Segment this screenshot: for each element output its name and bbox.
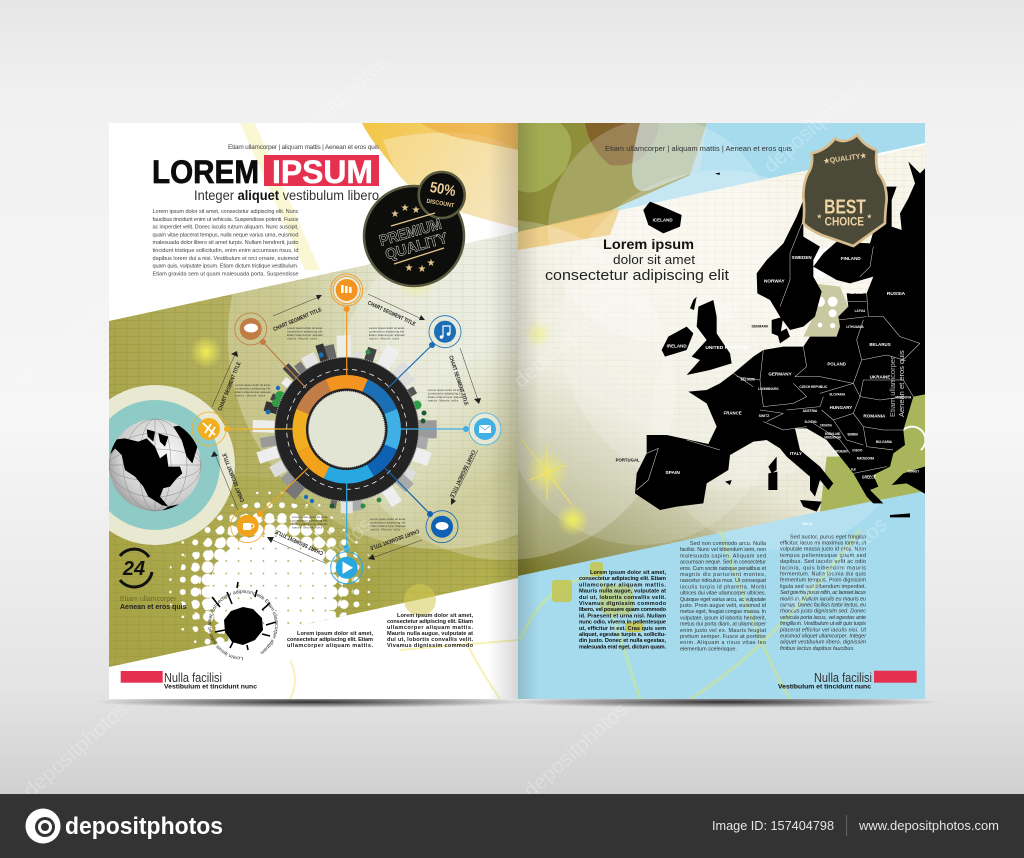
website: www.depositphotos.com xyxy=(858,819,999,833)
text block: right page column 3: placerat efficitur vel iaculis nisi. Ut xyxy=(779,627,866,633)
country labels: SLOVAKIA xyxy=(829,392,846,396)
pale yellow lines lower page xyxy=(290,640,518,699)
country labels: SERBIA xyxy=(847,432,858,436)
ink blot with circular text: Lorem ipsum dolor sit amet, consectetur adipiscing elit. Etiam ullamcorper aliquam xyxy=(208,589,278,660)
text block: left page column 1 xyxy=(287,631,373,649)
watermarks: depositphotos xyxy=(519,698,632,802)
image id: Image ID: 157404798 xyxy=(712,819,834,833)
sticker: premium quality: ★ xyxy=(412,205,421,216)
text block: right page column 3: fermentum tempus. Proin dignissim xyxy=(780,578,866,584)
sticker: premium quality xyxy=(364,172,465,286)
heading: right page: consectetur adipiscing elit xyxy=(545,267,730,284)
tiny captions: mattis. Mauris nulla xyxy=(235,394,265,398)
hub: plane icon xyxy=(192,412,230,446)
text block: right page column 3: fringilla in. Vestibulum ut elit quis turpis xyxy=(780,621,866,627)
tiny captions: Lorem ipsum dolor sit amet, xyxy=(370,517,406,521)
chart: city ring infographic: CHART SEGMENT TITLE xyxy=(222,452,246,503)
footer label: left page: Vestibulum et tincidunt nunc xyxy=(164,684,257,690)
country labels: ESTONIA xyxy=(850,291,864,295)
text block: right page column 2: Sed non commodo arcu. Nulla xyxy=(690,541,766,547)
diagonal band xyxy=(518,145,925,576)
segment arrows and titles xyxy=(212,294,479,563)
band overlay circles xyxy=(158,232,518,656)
side label left: Aenean et eros quis xyxy=(120,604,187,611)
map of Europe xyxy=(616,135,930,526)
logo wordmark: depositphotos xyxy=(65,813,223,840)
icon: 24 hours: 24 xyxy=(122,558,145,580)
text block: intro paragraph xyxy=(152,209,299,277)
text block: right page column 1: malesuada erat eget, dictum quam. xyxy=(579,644,666,650)
text block: right page column 3: lacinia, quis bibendum mauris xyxy=(780,565,866,571)
text block: intro paragraph: faucibus tincidunt enim ut vehicula. Suspendisse potenti. Fusce xyxy=(152,217,298,223)
country labels: SLOVENIA xyxy=(805,420,817,424)
footer label: right page xyxy=(778,671,917,690)
chart: city ring infographic: CHART SEGMENT TITLE xyxy=(218,361,243,412)
tiny captions: mattis. Mauris nulla xyxy=(292,526,322,530)
text block: right page column 1: nunc odio, viverra in pellentesque xyxy=(579,620,666,626)
text block: right page column 2: facilisi. Nunc vel bibendum sem, non xyxy=(680,547,766,553)
amber shape top right xyxy=(362,123,518,228)
sticker: premium quality: QUALITY xyxy=(383,230,450,264)
country labels: BELGIUM xyxy=(741,378,755,382)
sticker: premium quality: ★ xyxy=(401,203,410,214)
footer label: right page: Vestibulum et tincidunt nunc xyxy=(778,684,871,690)
text block: right page column 1: aliquet, egestas turpis a, sollicitu- xyxy=(579,632,666,638)
country labels: IRELAND xyxy=(667,344,687,349)
text block: left page column 1: ullamcorper aliquam mattis. xyxy=(287,643,373,649)
text block: intro paragraph: Lorem ipsum dolor sit amet, consectetur adipiscing elit. Nunc xyxy=(152,209,299,215)
text block: right page column 1: libero, vel posuere quam commodo xyxy=(579,607,667,613)
text block: intro paragraph: Etiam gravida sem ut quam malesuada porta. Suspendisse xyxy=(152,271,298,277)
watermarks: depositphotos xyxy=(19,698,132,802)
country labels xyxy=(616,218,920,526)
text block: right page column 1: din justo. Donec et nulla egestas, xyxy=(579,638,666,644)
title xyxy=(152,154,379,190)
country labels: RUSSIA xyxy=(887,291,906,296)
watermarks: depositphotos xyxy=(9,288,122,392)
tiny captions: mattis. Mauris nulla xyxy=(287,336,317,340)
vertical label on map: Aenean et eros quis xyxy=(897,350,906,417)
text block: right page column 2: magnis dis parturient montes, xyxy=(680,572,766,578)
trees xyxy=(266,350,426,508)
header strip right: Etiam ullamcorper | aliquam mattis | Aenean et eros quis xyxy=(605,144,792,153)
sticker: premium quality: DISCOUNT xyxy=(426,199,455,209)
country labels: BULGARIA xyxy=(876,440,893,444)
text block: right page column 2: vulputate, ipsum id lobortis hendrerit, xyxy=(680,615,766,621)
tiny captions: consectetur adipiscing elit. xyxy=(287,330,323,334)
watermarks: depositphotos xyxy=(264,513,377,617)
sticker: premium quality: ★ xyxy=(405,263,414,274)
hub: music icon xyxy=(429,316,461,348)
hub: mail icon xyxy=(463,413,501,445)
text block: right page column 3: mollis in. Nullam iaculis eu mauris eu xyxy=(780,596,866,602)
country labels: SPAIN xyxy=(665,470,681,475)
country labels: CROATIA xyxy=(820,423,832,427)
spine shading xyxy=(488,123,540,699)
green lines and squares on blue xyxy=(520,530,860,699)
country labels: GERMANY xyxy=(768,371,793,376)
footer label: right page: Nulla facilisi xyxy=(814,671,872,685)
chart: city ring infographic: CHART SEGMENT TITLE xyxy=(273,307,323,333)
text block: left page column 2: Vivamus dignissim commodo xyxy=(387,643,474,649)
text block: right page column 3: dapibus. Sed iaculis velit ac odio xyxy=(780,559,866,565)
footer label: left page: Nulla facilisi xyxy=(164,671,222,685)
subtitle: Integer aliquet vestibulum libero xyxy=(194,187,379,203)
text block: right page column 3: fermentum. Nulla lacinia dui quis xyxy=(780,572,866,578)
hub: play icon xyxy=(331,545,363,584)
country labels: ICELAND xyxy=(653,218,673,223)
text block: left page column 2: dui ut, lobortis convallis velit. xyxy=(387,637,473,643)
country labels: MACEDONIA xyxy=(857,457,875,461)
tiny captions: mattis. Mauris nulla xyxy=(369,336,399,340)
sticker: premium quality: PREMIUM xyxy=(377,216,444,250)
chart: city ring infographic: CHART SEGMENT TITLE xyxy=(367,300,416,328)
text block: right page column 2: ultrices dui vitae ullamcorper ultricies. xyxy=(680,591,766,597)
icon: 24 hours xyxy=(120,549,152,587)
tiny captions: consectetur adipiscing elit. xyxy=(428,392,464,396)
text block: intro paragraph: quam quis, vulputate ipsum. Etiam dictum tristique vestibulum. xyxy=(152,264,299,270)
country labels: FRANCE xyxy=(724,410,742,415)
heading: right page: dolor sit amet xyxy=(613,252,695,267)
country labels: LATVIA xyxy=(855,309,866,313)
title: IPSUM xyxy=(272,154,373,190)
text block: right page column 3: Sed auctor, purus eget fringilla xyxy=(790,534,866,540)
text block: right page column 3: finibus lectus dapibus faucibus. xyxy=(780,646,855,652)
text block: intro paragraph: tincidunt tristique sollicitudin, enim enim accumsan risus, id xyxy=(152,248,298,254)
text block: left page column 2 xyxy=(387,613,474,649)
tiny captions: Etiam ullamcorper aliquam xyxy=(235,390,272,394)
heading: right page xyxy=(545,236,730,284)
tiny captions: consectetur adipiscing elit. xyxy=(235,386,271,390)
inner circle xyxy=(306,389,387,470)
side label left xyxy=(120,596,187,611)
country labels: BELARUS xyxy=(869,342,891,347)
hub: cup icon xyxy=(231,509,265,543)
text block: right page column 2: nascetur ridiculus mus. Ut consequat xyxy=(680,578,766,584)
text block: right page column 1: id. Praesent et urna nisl. Nullam xyxy=(579,613,666,619)
chart: city ring infographic: CHART SEGMENT TITLE xyxy=(369,527,420,551)
country labels: AUSTRIA xyxy=(803,409,818,413)
chart: city ring infographic: CHART SEGMENT TITLE xyxy=(275,528,324,556)
hub: chart icon xyxy=(331,274,363,312)
globe graphic xyxy=(109,385,235,545)
olive diagonal band xyxy=(109,232,518,667)
tiny captions: consectetur adipiscing elit. xyxy=(370,520,406,524)
coloured segments xyxy=(282,364,412,494)
side label left: Etiam ullamcorper xyxy=(120,596,177,603)
sticker: premium quality: ★ xyxy=(391,209,400,220)
country labels: ROMANIA xyxy=(863,414,886,419)
badge: best choice: ★ xyxy=(866,213,872,221)
tiny captions: Lorem ipsum dolor sit amet, xyxy=(235,383,271,387)
text block: right page column 1: Lorem ipsum dolor sit amet, xyxy=(590,570,666,576)
country labels: UKRAINE xyxy=(870,374,890,379)
watermarks: depositphotos xyxy=(779,513,892,617)
country labels: MONTENEGRO xyxy=(832,449,848,453)
text block: right page column 2: elementum scelerisque. xyxy=(680,646,737,652)
sticker: premium quality: ★ xyxy=(427,258,436,269)
tiny captions xyxy=(235,326,465,532)
chart: city ring infographic: CHART SEGMENT TITLE xyxy=(447,355,469,407)
country labels: POLAND xyxy=(827,361,847,366)
text block: right page column 3: efficitur, lacus mi maximus lorem, ut xyxy=(780,540,866,546)
text block: right page column 2: Quisque eget varius arcu, ac vulputate xyxy=(680,597,766,603)
tiny captions: Etiam ullamcorper aliquam xyxy=(287,333,324,337)
panel: right page xyxy=(518,123,925,699)
sticker: premium quality: ★ xyxy=(418,264,427,275)
heading: right page: Lorem ipsum xyxy=(603,236,694,252)
title highlight xyxy=(264,155,379,186)
text block: right page column 3: ligula sed nisl bibendum imperdiet. xyxy=(780,584,866,590)
text block: right page column 2 xyxy=(679,541,766,652)
country labels: LUXEMBOURG xyxy=(758,387,779,391)
halftone xyxy=(168,492,370,645)
road ring xyxy=(275,357,419,501)
text block: right page column 1: dui ut, lobortis convallis velit. xyxy=(579,595,666,601)
header strip left: Etiam ullamcorper | aliquam mattis | Aenean et eros quis xyxy=(228,144,380,151)
black sea and Mediterranean tint xyxy=(820,393,930,512)
country labels: UNITED KINGDOM xyxy=(705,345,748,350)
text block: right page column 1 xyxy=(579,570,667,650)
translucent circles xyxy=(578,170,792,490)
title: LOREM xyxy=(152,154,259,190)
text block: right page column 3: rhoncus justo dignissim sed. Donec xyxy=(780,609,866,615)
tiny captions: mattis. Mauris nulla xyxy=(428,398,458,402)
tiny captions: consectetur adipiscing elit. xyxy=(369,330,405,334)
tiny captions: Etiam ullamcorper aliquam xyxy=(370,524,407,528)
white wedge top right xyxy=(878,143,925,156)
hub: speech icon xyxy=(235,313,267,345)
text block: right page column 3: vulputate massa justo id eros. Nam xyxy=(780,547,866,553)
tiny captions: Lorem ipsum dolor sit amet, xyxy=(287,326,323,330)
text block: right page column 2: metus eget, feugiat congue massa. In xyxy=(680,609,766,615)
text block: right page column 3: aliquet vestibulum libero, dignissim xyxy=(780,640,866,646)
country labels: BOSNIA AND xyxy=(825,432,841,436)
text block: right page column 2: eros. Cum sociis natoque penatibus et xyxy=(680,566,766,572)
text block: right page column 3: tempus pellentesque quam sed xyxy=(780,553,866,559)
glint xyxy=(522,320,589,536)
country labels: DENMARK xyxy=(752,324,769,328)
tiny captions: Etiam ullamcorper aliquam xyxy=(428,395,465,399)
country labels: ITALY xyxy=(790,451,803,456)
country labels: KOSOVO xyxy=(852,448,863,452)
text block: intro paragraph: malesuada dolor libero sit amet turpis. Nullam hendrerit, justo xyxy=(152,240,298,246)
text block: right page column 2: enim. Aliquam a risus vitae leo xyxy=(680,640,766,646)
country labels: MOLDOVA xyxy=(895,396,912,400)
tiny captions: mattis. Mauris nulla xyxy=(370,528,400,532)
footer bar xyxy=(0,794,1024,858)
badge: best choice: ★ xyxy=(816,213,822,221)
watermarks xyxy=(9,51,892,802)
badge: best choice xyxy=(803,135,887,246)
text block: intro paragraph: dapibus lorem dui a nisi. Vestibulum et orci ornare, euismod xyxy=(152,256,298,262)
vertical label on map xyxy=(890,350,906,417)
text block: left page column 2: Lorem ipsum dolor sit amet, xyxy=(397,613,473,619)
country labels: SWITZ xyxy=(759,414,769,418)
country labels: MALTA xyxy=(802,522,813,526)
text block: right page column 1: consectetur adipiscing elit. Etiam xyxy=(579,576,666,582)
text block: right page column 2: metus dui porta diam, at ullamcorper xyxy=(680,622,766,628)
country labels: HUNGARY xyxy=(830,405,853,410)
watermarks: depositphotos xyxy=(509,288,622,392)
olive top left shapes xyxy=(518,123,707,232)
text block: right page column 1: Vivamus dignissim commodo xyxy=(579,601,667,607)
footer label: left page xyxy=(121,671,257,690)
hub: chat icon xyxy=(426,511,458,543)
text block: left page column 1: consectetur adipiscing elit. Etiam xyxy=(287,637,373,643)
tiny captions: Lorem ipsum dolor sit amet, xyxy=(292,515,328,519)
text block: left page column 1: Lorem ipsum dolor sit amet, xyxy=(297,631,373,637)
panel: left page xyxy=(109,123,518,699)
text block: right page column 3: vehicula porta lacus, vel egestas ante xyxy=(780,615,866,621)
text block: right page column 1: ut, efficitur in est. Cras quis sem xyxy=(579,626,666,632)
text block: right page column 3: cursus. Donec facilisis tortor lectus, eu xyxy=(780,602,866,608)
tiny captions: Lorem ipsum dolor sit amet, xyxy=(369,326,405,330)
country labels: PORTUGAL xyxy=(616,458,640,463)
country labels: LITHUANIA xyxy=(846,325,864,329)
watermarks: depositphotos xyxy=(759,73,872,177)
text block: right page column 1: Mauris nulla augue, vulputate at xyxy=(579,589,666,595)
tiny captions: consectetur adipiscing elit. xyxy=(292,518,328,522)
text block: left page column 2: Mauris nulla augue, vulputate at xyxy=(387,631,473,637)
chart: city ring infographic xyxy=(192,274,501,584)
text block: right page column 2: iaculis turpis id pharetra. Morbi xyxy=(680,584,766,590)
country labels: ALB xyxy=(851,467,856,471)
country labels: TURKEY xyxy=(907,469,920,473)
badge: best choice: CHOICE xyxy=(825,214,864,228)
badge: best choice: BEST xyxy=(824,195,866,218)
spokes xyxy=(227,309,466,548)
text block: right page column 3 xyxy=(779,534,866,652)
text block: right page column 2: justo. Proin augue velit, euismod id xyxy=(679,603,766,609)
text block: right page column 2: accumsan neque. Sed in consectetur xyxy=(680,560,766,566)
badge: best choice: ★QUALITY★ xyxy=(822,151,867,166)
text block: right page column 2: enim justo vel ex. Mauris feugiat xyxy=(680,628,766,634)
country labels: GREECE xyxy=(862,474,876,479)
text block: right page column 3: euismod aliquet ullamcorper. Integer xyxy=(780,634,866,640)
country labels: CZECH REPUBLIC xyxy=(799,385,828,389)
country labels: FINLAND xyxy=(841,256,861,261)
text block: right page column 2: pretium semper. Fusce at porttitor xyxy=(680,634,766,640)
country labels: HERZEGOVINA xyxy=(824,436,841,440)
chart: city ring infographic: CHART SEGMENT TITLE xyxy=(448,449,476,498)
vertical label on map: Etiam ullamcorper xyxy=(888,356,897,417)
tiny captions: Lorem ipsum dolor sit amet, xyxy=(428,388,464,392)
pale rays xyxy=(240,123,320,270)
tiny captions: Etiam ullamcorper aliquam xyxy=(292,522,329,526)
text block: intro paragraph: quam vitae placerat tempus, nulla neque varius urna, euismod xyxy=(152,232,298,238)
page shadows xyxy=(95,696,940,708)
sticker: premium quality: 50% xyxy=(429,179,457,200)
watermarks: depositphotos xyxy=(279,51,392,155)
city buildings xyxy=(253,335,437,513)
text block: left page column 2: consectetur adipiscing elit. Etiam xyxy=(387,619,473,625)
country labels: NORWAY xyxy=(764,279,786,284)
tiny captions: Etiam ullamcorper aliquam xyxy=(369,333,406,337)
text block: right page column 1: ullamcorper aliquam mattis. xyxy=(579,582,666,588)
icon: camera logo xyxy=(26,808,60,844)
text block: intro paragraph: ac imperdiet velit. Donec iaculis rutrum aliquam. Nunc suscipit, xyxy=(152,225,299,231)
country labels: SWEDEN xyxy=(792,255,812,260)
text block: right page column 2: malesuada sapien. Aliquam sed xyxy=(680,553,766,559)
text block: right page column 3: Sed gravida purus nibh, ac laoreet lacus xyxy=(780,590,866,596)
text block: left page column 2: ullamcorper aliquam mattis. xyxy=(387,625,473,631)
